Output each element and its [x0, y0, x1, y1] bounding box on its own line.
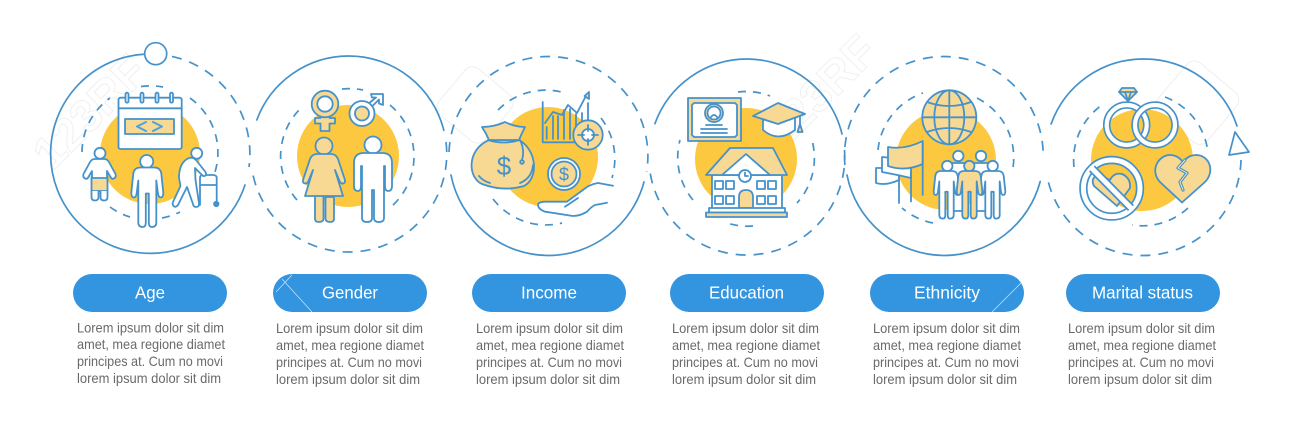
icon: graduation cap [753, 103, 805, 136]
text block: marital status: lorem ipsum dolor sit dim [1068, 372, 1212, 387]
yellow disc: income [498, 107, 598, 207]
yellow disc: age [100, 104, 200, 204]
text block: ethnicity: Lorem ipsum dolor sit dim [873, 321, 1020, 336]
text block: income: Lorem ipsum dolor sit dim [476, 321, 623, 336]
panel: age [51, 43, 250, 386]
icon: woman [303, 138, 345, 222]
text block: income: principes at. Cum no movi [476, 355, 622, 370]
inner dashed ring: gender [281, 89, 414, 206]
text: 123RF [752, 25, 887, 159]
text block: ethnicity: principes at. Cum no movi [873, 355, 1019, 370]
icon: school building [706, 148, 787, 217]
inner dashed ring: age [82, 86, 218, 218]
inner dashed ring: ethnicity [878, 93, 1014, 223]
text block: marital status: Lorem ipsum dolor sit dim [1068, 321, 1215, 336]
icon: calendar [118, 93, 182, 149]
icon: diploma [688, 98, 741, 141]
panel: education [650, 59, 845, 387]
icon: adult [131, 155, 163, 227]
text block: marital status: amet, mea regione diamet [1068, 338, 1216, 353]
pill: income [472, 274, 626, 312]
text block: ethnicity [873, 321, 1021, 387]
pill: income: Income [521, 282, 577, 302]
pill: age: Age [135, 282, 165, 302]
text block: ethnicity: amet, mea regione diamet [873, 338, 1021, 353]
text block: age: Lorem ipsum dolor sit dim [77, 320, 224, 336]
text block: education [672, 321, 820, 387]
pill: marital status: Marital status [1092, 282, 1193, 302]
pill: gender: Gender [322, 282, 378, 302]
text block: education: Lorem ipsum dolor sit dim [672, 321, 819, 336]
text block: age: amet, mea regione diamet [77, 337, 225, 352]
text block: age: lorem ipsum dolor sit dim [77, 371, 221, 386]
icon: group of people [934, 151, 1005, 219]
icon: crossed-out heart [1083, 160, 1140, 217]
icon: venus symbol [312, 91, 338, 131]
outer ring: age [51, 43, 250, 253]
icon: coin and hand [538, 158, 613, 216]
inner dashed ring: income [493, 90, 615, 225]
icon: broken heart [1155, 155, 1210, 202]
text: 123RF [22, 45, 157, 179]
yellow disc: gender [297, 105, 399, 207]
text block: age: principes at. Cum no movi [77, 354, 223, 369]
panel: ethnicity [844, 56, 1043, 387]
text block: marital status [1068, 321, 1216, 387]
icon: money bag [472, 122, 534, 189]
pill: ethnicity [870, 274, 1024, 312]
pill: marital status [1066, 274, 1220, 312]
text block: education: principes at. Cum no movi [672, 355, 818, 370]
text block: gender: amet, mea regione diamet [276, 338, 424, 353]
text block: marital status: principes at. Cum no movi [1068, 355, 1214, 370]
pill: ethnicity: Ethnicity [914, 282, 980, 302]
inner dashed ring: marital status [1074, 97, 1208, 226]
text block: gender [276, 321, 424, 387]
pill: education [670, 274, 824, 312]
outer ring: income [449, 56, 648, 256]
panel: income [449, 56, 648, 387]
text block: income: lorem ipsum dolor sit dim [476, 372, 620, 387]
icon: money bag: $ [497, 151, 512, 181]
outer ring: marital status [1047, 59, 1241, 256]
panel: gender [253, 56, 447, 387]
text block: education: lorem ipsum dolor sit dim [672, 372, 816, 387]
panel: marital status [1047, 59, 1249, 387]
text block: gender: principes at. Cum no movi [276, 355, 422, 370]
outer ring: gender [253, 56, 447, 252]
icon: wedding rings [1107, 88, 1175, 145]
icon: child [83, 148, 116, 200]
yellow disc: marital status [1091, 109, 1193, 211]
text block: ethnicity: lorem ipsum dolor sit dim [873, 372, 1017, 387]
text block: income: amet, mea regione diamet [476, 338, 624, 353]
icon: man [354, 136, 392, 222]
text block: gender: lorem ipsum dolor sit dim [276, 372, 420, 387]
pill: age [73, 274, 227, 312]
outer ring: education [650, 59, 845, 255]
icon: growth chart with target [543, 92, 603, 150]
pill: gender [273, 274, 427, 312]
icon: elder with walker [173, 148, 218, 207]
icon: globe [922, 90, 976, 144]
arrow: triangle marker [1229, 132, 1249, 155]
inner dashed ring: education [678, 92, 814, 226]
icon: coin and hand: $ [559, 164, 569, 184]
icon: mars symbol [350, 94, 383, 126]
outer ring: ethnicity [844, 56, 1043, 255]
text block: income [476, 321, 624, 387]
icon: flags [876, 141, 923, 203]
text block: education: amet, mea regione diamet [672, 338, 820, 353]
text block: age [77, 320, 225, 386]
text block: gender: Lorem ipsum dolor sit dim [276, 321, 423, 336]
pill: education: Education [709, 282, 784, 302]
yellow disc: education [695, 108, 797, 210]
yellow disc: ethnicity [896, 110, 996, 210]
